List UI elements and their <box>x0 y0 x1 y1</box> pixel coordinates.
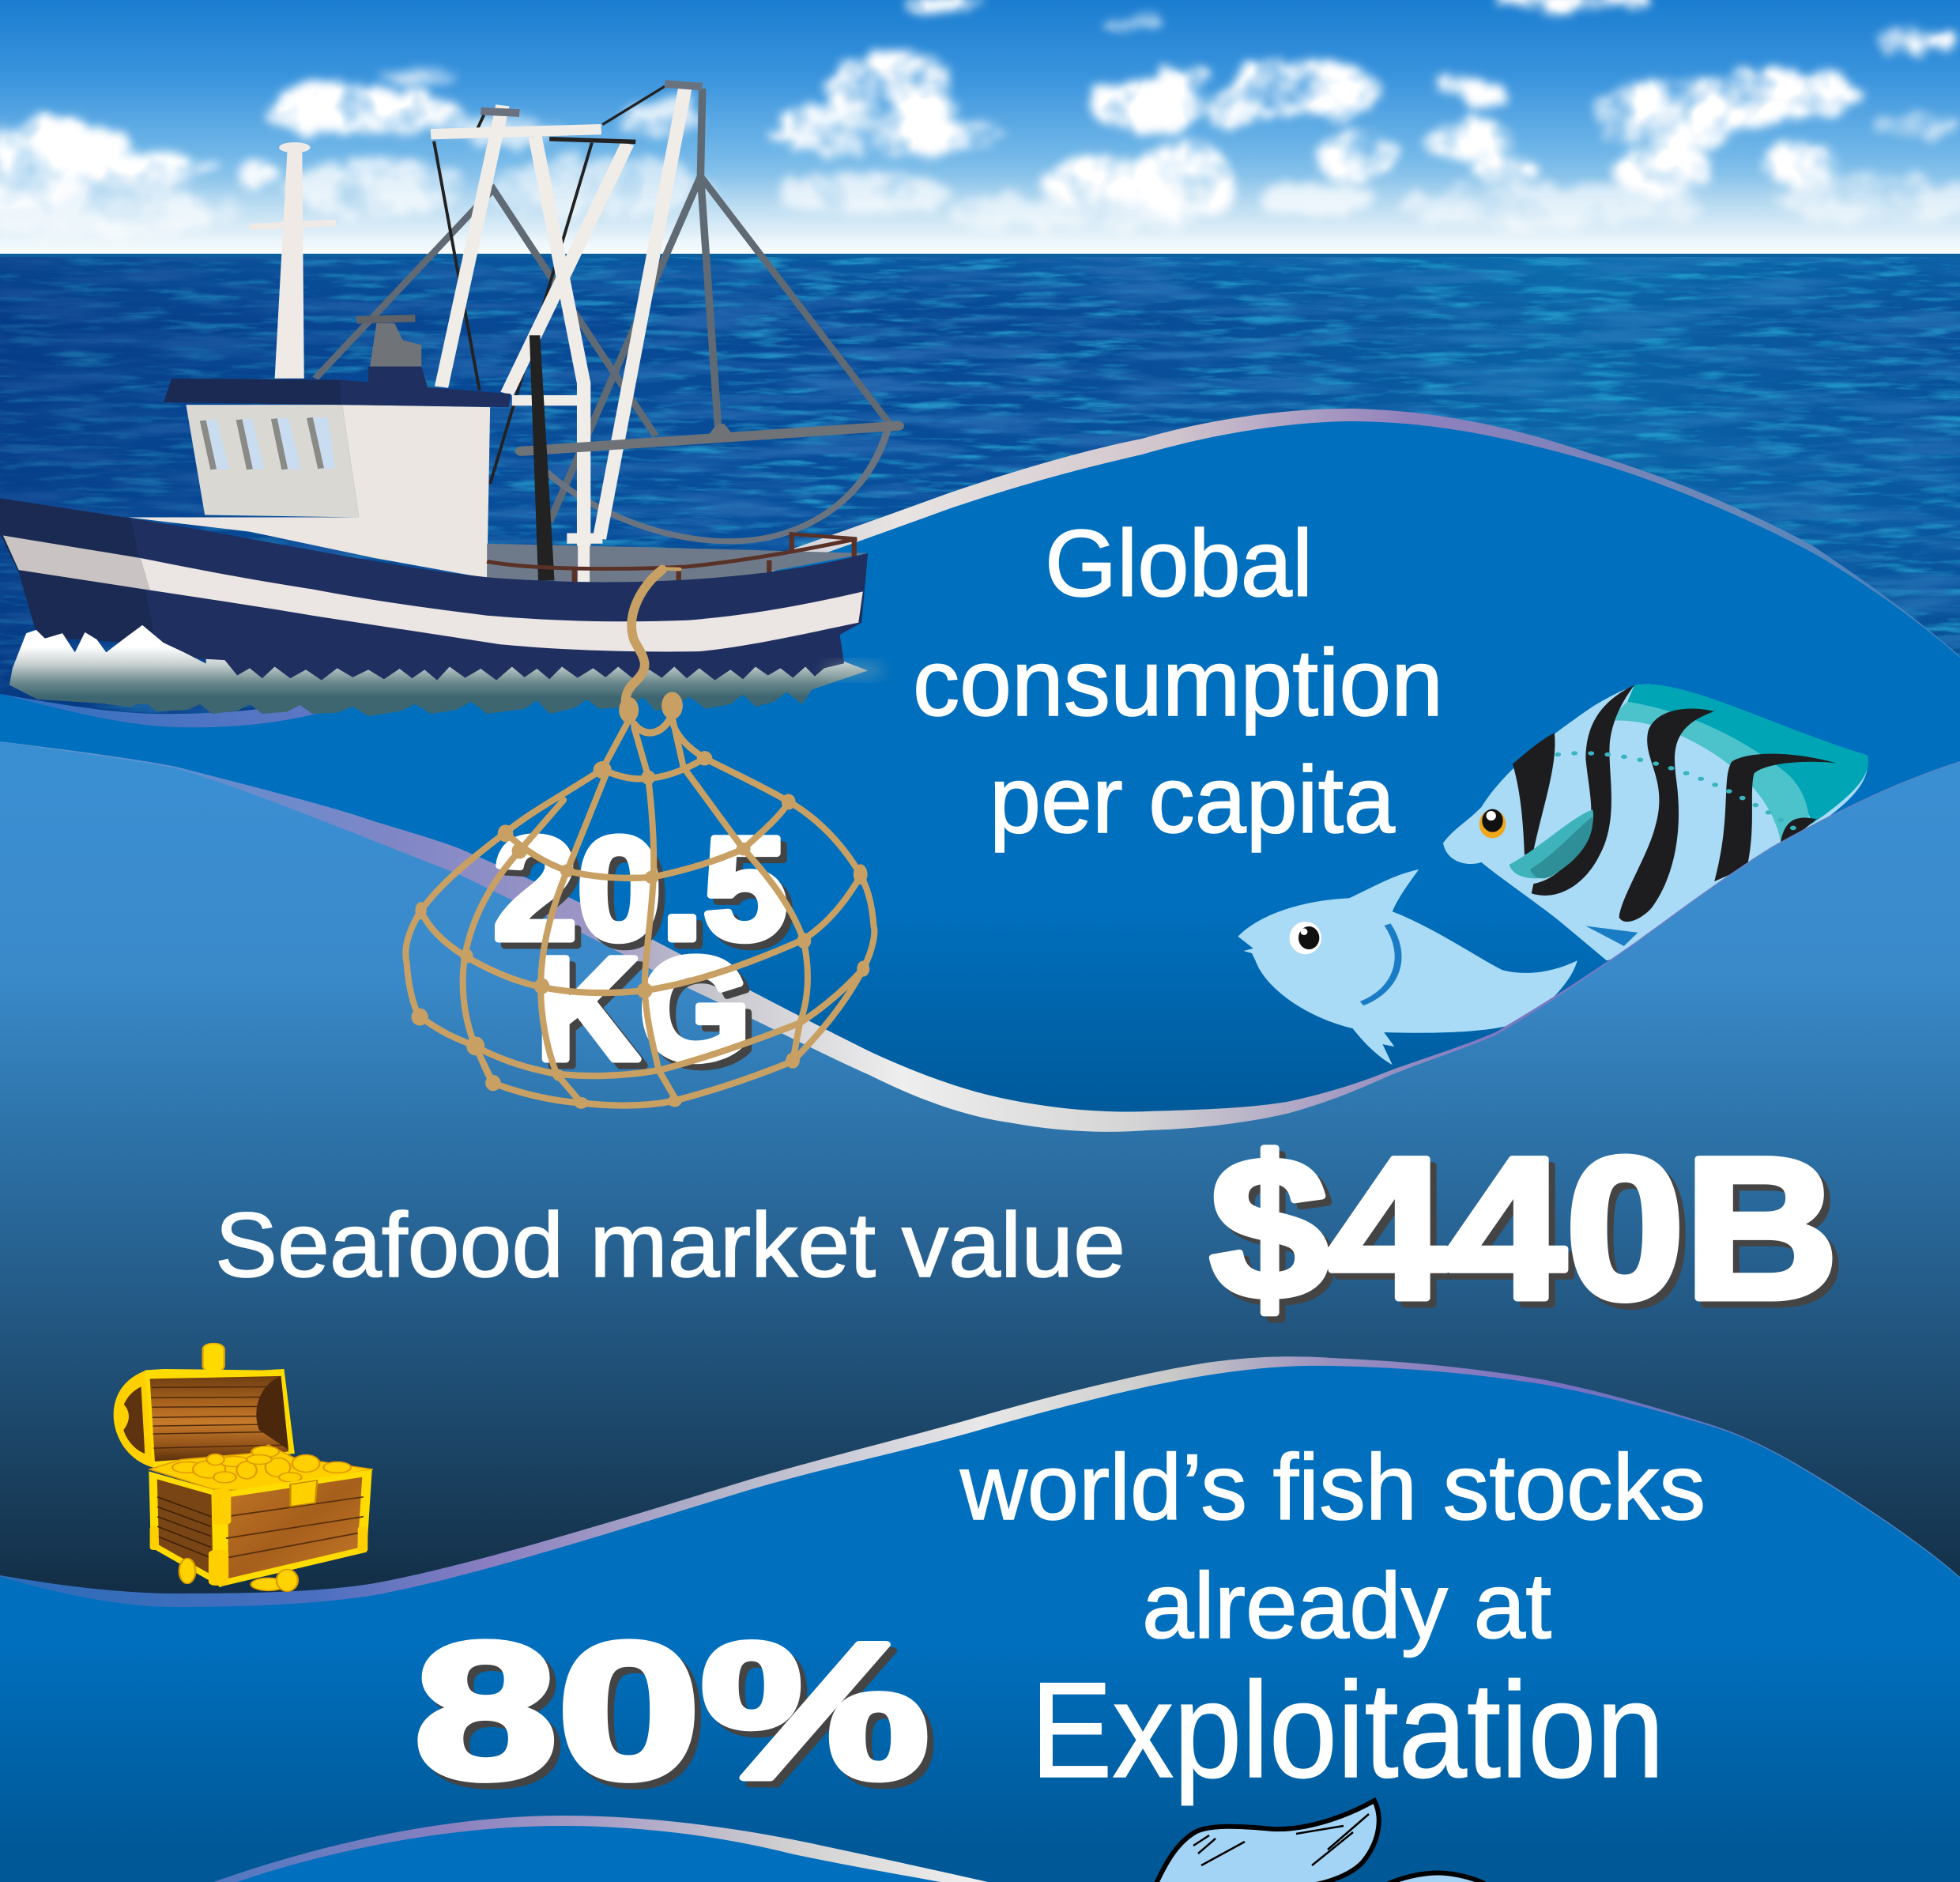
ring 2 <box>506 801 790 878</box>
text: world's fish stocks already at Exploitation: already at <box>1142 1554 1551 1658</box>
grey boom <box>522 426 898 451</box>
heading: global consumption per capita: consumption <box>913 630 1443 736</box>
wave 2 top edge ribbon <box>0 741 1960 1186</box>
heading: global consumption per capita <box>913 511 1443 853</box>
boom bracket <box>709 424 732 435</box>
hull stripe bow <box>3 536 150 590</box>
top loop <box>634 717 671 733</box>
ring 4 <box>476 969 863 1076</box>
pectoral fin <box>1510 809 1593 878</box>
deck <box>487 544 868 586</box>
mast 1 crossbar <box>250 223 336 227</box>
lid hasp <box>203 1344 224 1371</box>
deck rail <box>487 534 857 583</box>
hook rope frayed tip <box>659 564 680 573</box>
hull <box>131 519 868 681</box>
eye <box>1290 922 1321 954</box>
corner brackets <box>150 1489 368 1586</box>
cabin front <box>186 405 359 517</box>
outer envelope <box>405 758 874 1106</box>
chest lock <box>290 1480 317 1507</box>
stat: 80%: 80% <box>414 1602 929 1819</box>
lid dark curve <box>256 1376 288 1450</box>
lid planks <box>151 1386 287 1448</box>
heading: global consumption per capita: Global <box>1045 511 1313 617</box>
chest front planks <box>226 1497 364 1558</box>
stat: $440B: $440B <box>1210 1116 1838 1341</box>
icon: rope net bag <box>405 568 874 1109</box>
cabin roof <box>164 379 511 407</box>
top strands <box>602 720 744 849</box>
sky background <box>0 0 1960 255</box>
loose coins <box>179 1559 298 1591</box>
lid frame <box>145 1369 295 1468</box>
clouds <box>0 0 1960 238</box>
top knots <box>411 692 869 1109</box>
chest front face <box>224 1473 368 1582</box>
text: world's fish stocks already at Exploitation: Exploitation <box>1031 1654 1664 1806</box>
ring 1 <box>602 758 705 779</box>
body stripes <box>1513 685 1836 922</box>
panel: seafood market value wave <box>0 741 1960 1882</box>
lid side strap <box>115 1402 129 1432</box>
stat: 20.5 KG <box>493 808 787 1091</box>
dorsal fin highlight <box>1607 702 1810 841</box>
wake glow at stern <box>822 664 885 677</box>
mast 1 cap <box>279 142 311 153</box>
stat: 20.5 KG: 20.5 <box>493 808 787 971</box>
stat: 20.5 KG: KG <box>536 928 751 1091</box>
black pole <box>530 335 555 580</box>
lid interior wood <box>150 1376 288 1461</box>
pectoral fin shade <box>1530 817 1592 878</box>
black rod <box>549 139 635 141</box>
hull white stripe <box>141 558 863 651</box>
text: world's fish stocks already at Exploitation: world’s fish stocks <box>959 1435 1706 1540</box>
hull bow <box>0 498 156 644</box>
white bow spray <box>9 625 281 704</box>
text: seafood market value: Seafood market value <box>215 1194 1125 1296</box>
cabin side <box>128 405 490 578</box>
white post over deck <box>576 498 591 582</box>
chest left face <box>153 1475 217 1582</box>
cabin windows <box>200 417 335 470</box>
ring 3 <box>421 877 861 993</box>
sea <box>0 254 1960 777</box>
horizon haze <box>0 174 1960 255</box>
lower fin mark <box>1585 926 1638 946</box>
lateral dots <box>1558 753 1794 828</box>
wave 1 top edge ribbon <box>0 409 1960 1882</box>
meridian strands <box>541 775 606 1103</box>
black stays <box>434 86 665 484</box>
mast 1 <box>275 153 304 379</box>
tail hatching <box>1193 1814 1369 1865</box>
hook rope <box>626 570 662 713</box>
grey mast caps <box>481 84 703 113</box>
coins heap <box>150 1445 373 1491</box>
funnel <box>356 315 428 388</box>
chest left planks <box>157 1497 211 1558</box>
lid side <box>114 1370 153 1467</box>
icon: treasure chest <box>114 1344 373 1591</box>
illustration: fishing boat <box>0 84 898 716</box>
net curve <box>546 428 888 541</box>
dorsal fin <box>1627 685 1868 824</box>
icon: small light blue fish <box>1238 869 1577 1065</box>
wave 3 top edge ribbon <box>0 1356 1960 1882</box>
rigging: grey stays <box>315 89 890 522</box>
white frame legs <box>431 89 685 580</box>
panel: bottom wave <box>237 1826 940 1882</box>
eye <box>1479 809 1506 839</box>
heading: global consumption per capita: per capita <box>989 747 1395 853</box>
gill <box>1362 925 1398 1004</box>
icon: whale tail <box>1155 1801 1487 1882</box>
wave 4 top edge ribbon <box>213 1816 988 1882</box>
icon: striped angelfish <box>1443 684 1868 960</box>
text: world's fish stocks already at Exploitation <box>959 1435 1706 1806</box>
panel: exploitation wave <box>0 1366 1960 1882</box>
fish body top <box>1385 1873 1487 1882</box>
foam wake behind hull <box>19 656 868 716</box>
lid side wood <box>122 1386 145 1454</box>
panel: global consumption wave <box>0 421 1960 1882</box>
